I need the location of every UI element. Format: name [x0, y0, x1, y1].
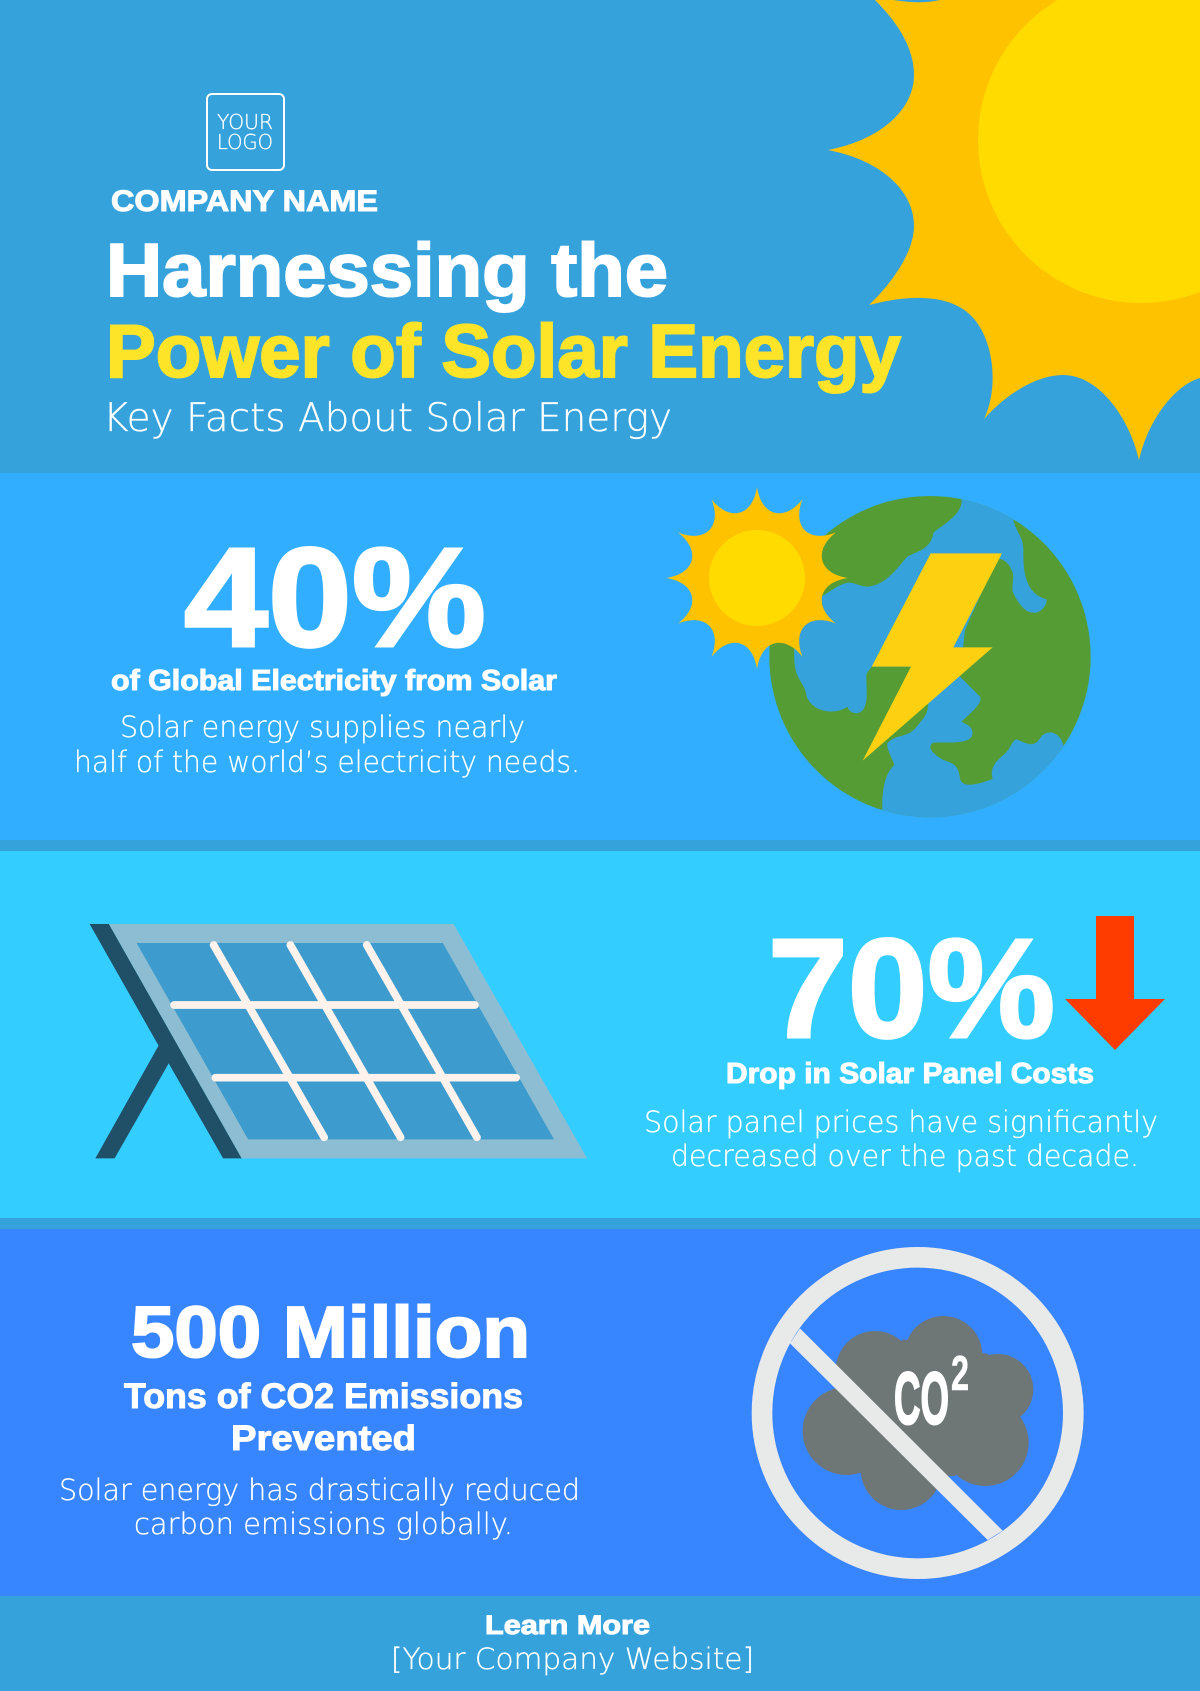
icon: earth with lightning bolt and sun — [666, 470, 1091, 837]
icon: earth — [769, 496, 1091, 818]
title line 1: Harnessing the — [106, 228, 668, 312]
description: carbon emissions globally. — [134, 1507, 513, 1541]
CO2 label — [894, 1347, 969, 1440]
description: Solar energy supplies nearly — [120, 710, 525, 744]
description — [74, 710, 580, 779]
icon: no CO2 sign — [762, 1257, 1073, 1569]
icon: large sun — [828, 0, 1200, 460]
panel: emissions prevented — [0, 1229, 1200, 1596]
stat: 500 Million: 500 Million — [131, 1293, 530, 1373]
panel: header — [0, 0, 1200, 473]
panel: footer — [0, 1596, 1200, 1691]
title line 2: Power of Solar Energy — [106, 309, 901, 393]
icon: red down arrow — [1065, 916, 1165, 1050]
CO2 label: CO — [894, 1357, 949, 1440]
description — [644, 1105, 1158, 1173]
website: [Your Company Website] — [391, 1642, 754, 1676]
stat label: Drop in Solar Panel Costs — [726, 1058, 1094, 1090]
logo placeholder: YOUR — [217, 110, 273, 134]
icon: small sun — [666, 487, 848, 669]
icon: cloud — [803, 1316, 1033, 1510]
description: Solar energy has drastically reduced — [59, 1473, 580, 1507]
stat: 40%: 40% — [184, 518, 486, 676]
panel: solar panel costs — [0, 851, 1200, 1218]
stat label: of Global Electricity from Solar — [111, 665, 557, 697]
stat label — [124, 1377, 523, 1458]
call to action: Learn More — [485, 1610, 650, 1640]
logo placeholder — [207, 94, 284, 170]
description — [59, 1473, 580, 1541]
description: Solar panel prices have significantly — [644, 1105, 1158, 1139]
panel: global electricity — [0, 470, 1200, 840]
stat: 70%: 70% — [768, 909, 1055, 1067]
company name: COMPANY NAME — [111, 185, 378, 218]
stat label: Prevented — [231, 1419, 416, 1458]
stat label: Tons of CO2 Emissions — [124, 1377, 523, 1416]
description: half of the world’s electricity needs. — [74, 745, 580, 779]
CO2 label: 2 — [951, 1347, 969, 1401]
icon: lightning bolt — [863, 553, 1002, 761]
description: decreased over the past decade. — [671, 1139, 1139, 1173]
icon: solar panel — [90, 924, 587, 1158]
logo placeholder: LOGO — [217, 130, 273, 154]
icon: prohibition ring — [762, 1257, 1073, 1569]
subtitle: Key Facts About Solar Energy — [103, 396, 672, 441]
